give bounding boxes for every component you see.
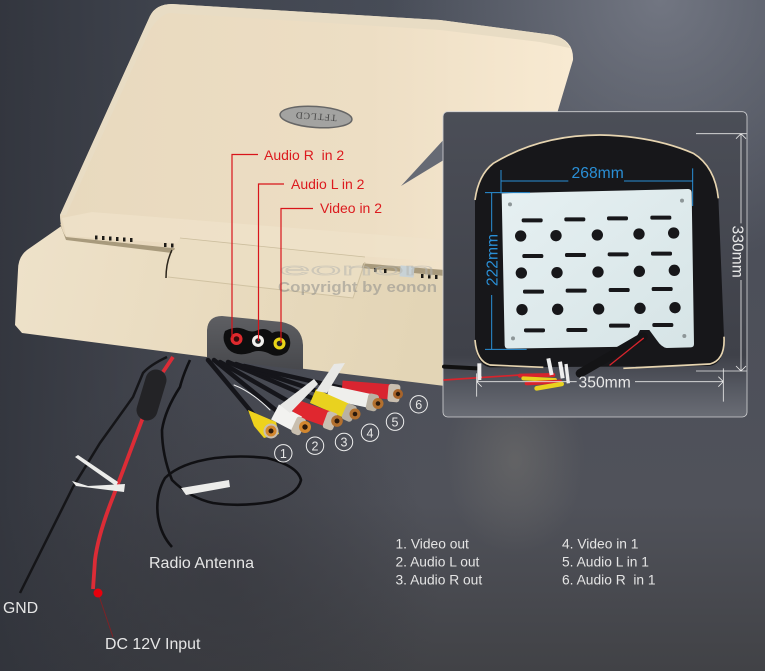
marker 4 [361,424,379,441]
connector 4: yellow [313,396,360,423]
dimension: 222mm: 222mm [484,234,501,286]
numbered markers [275,396,427,462]
connector 6: red [342,384,403,403]
watermark: eonon copyright: eonon [279,260,435,279]
cable tag 2 [316,363,345,393]
connector 5: white [328,392,384,412]
monitor housing [15,4,573,386]
callout: Audio R in 2: Audio R in 2 [264,147,344,163]
ferrite choke [147,380,156,410]
marker 5 [386,413,404,430]
inset cable bundle [444,337,643,388]
legend: outputs: 3. Audio R out [396,572,482,588]
callout: Audio R in 2 [232,147,344,338]
shadow gap under lid [60,224,445,276]
wire: radio antenna [157,360,301,547]
RCA cable bundle [208,360,403,438]
dimension: 350mm: 350mm [579,375,631,392]
dimension: 222mm [484,193,530,349]
mounting plate [502,189,694,349]
marker 2 [306,437,324,454]
base unit [15,200,445,386]
legend: inputs: 4. Video in 1 [562,536,638,552]
connector 1: yellow [248,410,279,438]
port panel [207,316,303,370]
callout: Video in 2 [281,200,382,343]
marker 1 [275,445,292,462]
watermark: eonon copyright: Copyright by eonon [278,279,437,296]
dimension: 330mm: 330mm [729,226,746,278]
label: Radio Antenna: Radio Antenna [149,555,254,572]
device back [475,135,724,367]
socket: red [230,333,242,345]
legend: inputs: 6. Audio R in 1 [562,572,656,588]
label: DC 12V Input: DC 12V Input [105,636,201,653]
dimension: 268mm: 268mm [572,165,624,182]
wire: DC 12V red [93,357,173,589]
legend: inputs: 5. Audio L in 1 [562,554,649,570]
lid vent slots [95,236,438,279]
label: GND: GND [3,600,38,617]
marker 3 [335,433,353,451]
socket recess [224,328,290,356]
plate holes [515,216,681,332]
legend: outputs: 2. Audio L out [396,554,480,570]
cable tag 1 [280,379,318,413]
dimension: 330mm [696,134,747,371]
flip-up lid [60,4,573,280]
marker 6: 6 [415,398,422,412]
socket: white [252,335,264,347]
badge: TFT LCD [279,104,353,130]
marker 6 [410,396,427,413]
marker 3: 3 [341,436,348,450]
badge: TFT LCD: TFTLCD [295,109,337,122]
marker 5: 5 [392,415,399,429]
inset panel: dimensions [443,112,747,417]
callout: Audio L in 2: Audio L in 2 [291,176,365,192]
marker 2: 2 [312,439,319,453]
wire tags [72,455,230,495]
marker 1: 1 [280,447,287,461]
connector 3: red [294,407,343,431]
dimension: 350mm [477,368,723,402]
white lead wire [234,385,270,410]
device trim [475,135,724,368]
legend: outputs: 1. Video out [396,536,469,552]
connector 2: white [275,412,311,436]
callout: Video in 2: Video in 2 [320,200,382,216]
marker 4: 4 [367,426,374,440]
wire: GND [20,357,167,593]
callout: Audio L in 2 [258,176,365,341]
callout wedge to inset [401,136,447,186]
dimension: 268mm [501,165,693,206]
hinge cover [168,238,365,298]
legend: inputs [562,536,656,588]
socket: yellow [274,338,286,350]
watermark: eonon copyright [278,260,437,296]
red marker: DC input [94,588,113,637]
legend: outputs [396,536,482,588]
